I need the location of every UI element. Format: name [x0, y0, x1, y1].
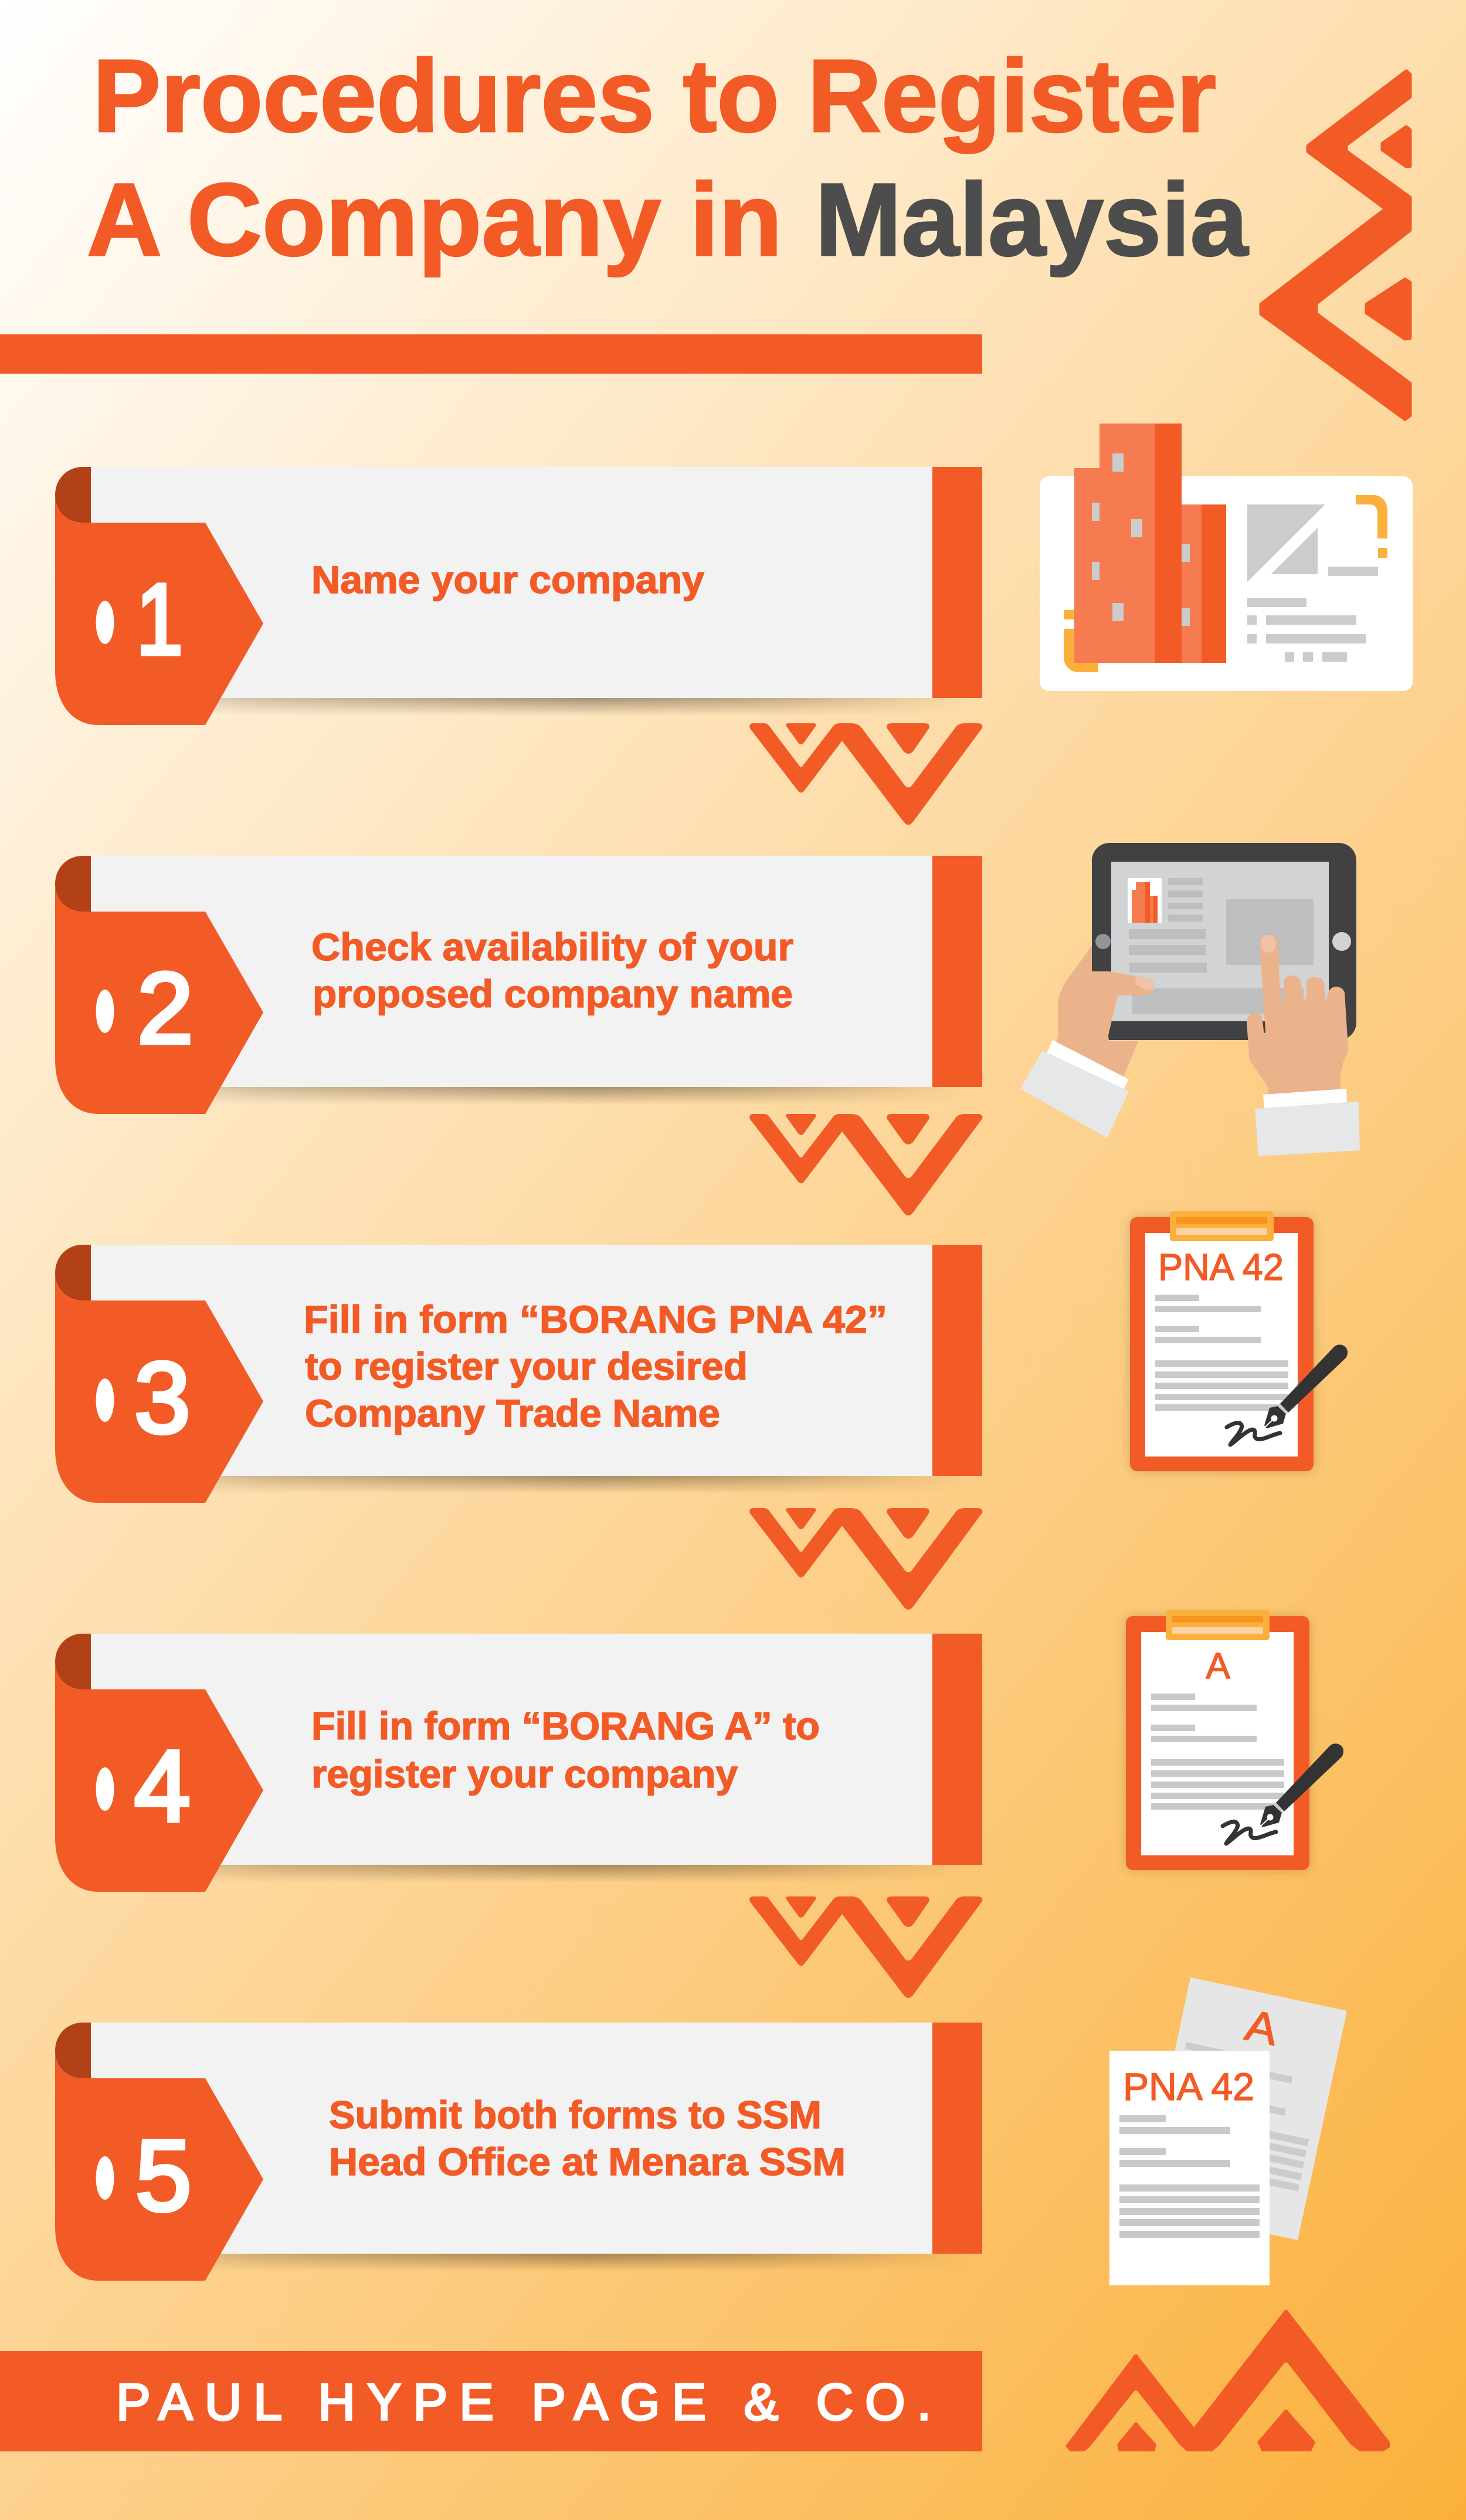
form lines [1151, 1693, 1284, 1810]
windows [1092, 453, 1190, 626]
title: A Company in [87, 162, 782, 277]
number tag [55, 495, 263, 725]
step text [329, 2093, 846, 2183]
front sheet lines [1119, 2115, 1260, 2238]
step text: Check availability of your [311, 925, 793, 968]
number dot [96, 990, 114, 1033]
ribbon end bar [932, 467, 982, 698]
paper [1141, 1632, 1294, 1855]
left hand [1050, 946, 1154, 1079]
board [1130, 1217, 1314, 1471]
step text: Fill in form “BORANG PNA 42” [304, 1298, 887, 1341]
step text: Fill in form “BORANG A” to [311, 1704, 820, 1747]
right sleeve [1255, 1102, 1360, 1156]
step text: Submit both forms to SSM [329, 2093, 822, 2136]
step 2 panel [55, 856, 982, 1114]
title: Procedures to Register [93, 39, 1216, 154]
form label: A [1206, 1646, 1230, 1686]
bracket top right [1356, 495, 1387, 558]
ribbon curl [55, 467, 91, 523]
number dot [96, 2156, 114, 2200]
form label: PNA 42 [1158, 1246, 1284, 1288]
ribbon shadow [213, 1476, 943, 1492]
left sleeve [1020, 1051, 1129, 1138]
number: 1 [136, 563, 183, 676]
icon: clipboard PNA 42 [1130, 1211, 1348, 1471]
front sheet label: PNA 42 [1123, 2065, 1254, 2108]
ribbon shadow [213, 2254, 943, 2270]
back sheet lines [1186, 2045, 1308, 2188]
step text [311, 925, 793, 1015]
ribbon body [91, 1634, 932, 1865]
tablet screen [1111, 862, 1329, 1021]
number: 3 [134, 1342, 191, 1454]
screen content blocks [1129, 878, 1314, 1014]
step 5 panel [55, 2023, 982, 2281]
ribbon shadow [213, 1865, 943, 1881]
left thumbnail [1135, 977, 1154, 990]
number dot [96, 601, 114, 644]
left cuff [1047, 1040, 1129, 1090]
title [87, 39, 1248, 277]
number: 2 [137, 952, 194, 1065]
ribbon end bar [932, 2023, 982, 2254]
number: 5 [135, 2119, 192, 2232]
screen logo [1128, 878, 1162, 923]
tall building [1074, 424, 1155, 663]
step text: Head Office at Menara SSM [329, 2140, 846, 2183]
tablet buttons [1095, 934, 1111, 949]
title underline bar [0, 334, 982, 374]
step text [304, 1298, 887, 1435]
step text: Name your company [311, 558, 704, 601]
pen [1260, 1743, 1343, 1827]
ribbon body [91, 856, 932, 1087]
number tag [55, 2051, 263, 2281]
card logo and lines [1247, 504, 1378, 662]
ribbon curl [55, 2023, 91, 2078]
ribbon shadow [213, 698, 943, 714]
board shadow [1130, 1217, 1314, 1471]
step 3 panel [55, 1245, 982, 1503]
ribbon shadow [213, 1087, 943, 1103]
step text [311, 1704, 820, 1796]
short building [1182, 504, 1202, 663]
icon: two forms stacked [1109, 1977, 1347, 2285]
title: Malaysia [815, 162, 1248, 277]
step text: to register your desired [305, 1344, 748, 1388]
number tag [55, 1662, 263, 1892]
logo: footer mountains [1065, 2310, 1390, 2451]
arrow: down chevron 2 [749, 1114, 982, 1215]
pen [1264, 1344, 1348, 1428]
paper [1145, 1233, 1298, 1457]
signature [1227, 1422, 1280, 1445]
arrow: down chevron 4 [749, 1896, 982, 1998]
arrow: down chevron 1 [749, 723, 982, 825]
ribbon end bar [932, 856, 982, 1087]
right cuff [1263, 1089, 1347, 1108]
number tag [55, 1273, 263, 1503]
step text: register your company [311, 1752, 738, 1796]
logo: top right chevrons [1261, 72, 1410, 419]
form lines [1155, 1295, 1288, 1411]
ribbon body [91, 467, 932, 698]
back sheet label: A [1241, 2000, 1282, 2055]
back sheet [1142, 1977, 1347, 2240]
step text: proposed company name [313, 972, 793, 1015]
clip [1170, 1211, 1274, 1241]
number: 4 [134, 1730, 191, 1842]
clip [1166, 1610, 1270, 1640]
right fingertip nail [1261, 935, 1276, 953]
ribbon curl [55, 856, 91, 912]
ribbon curl [55, 1245, 91, 1300]
ribbon body [91, 2023, 932, 2254]
icon: clipboard A [1126, 1610, 1343, 1870]
footer company name: PAUL HYPE PAGE & CO. [116, 2373, 931, 2431]
ribbon curl [55, 1634, 91, 1689]
board [1126, 1616, 1309, 1870]
icon: business card with building [1040, 424, 1413, 691]
number tag [55, 884, 263, 1114]
step 1 panel [55, 467, 982, 725]
number dot [96, 1767, 114, 1811]
board shadow [1126, 1616, 1309, 1870]
tablet body [1092, 843, 1356, 1040]
front sheet [1109, 2051, 1270, 2285]
signature [1223, 1821, 1276, 1844]
step text: Company Trade Name [305, 1391, 720, 1435]
right hand [1247, 935, 1348, 1096]
card [1040, 476, 1413, 691]
icon: hands holding tablet [1020, 843, 1360, 1156]
arrow: down chevron 3 [749, 1508, 982, 1610]
footer bar [0, 2351, 982, 2451]
ribbon end bar [932, 1634, 982, 1865]
number dot [96, 1378, 114, 1422]
ribbon end bar [932, 1245, 982, 1476]
ribbon body [91, 1245, 932, 1476]
step 4 panel [55, 1634, 982, 1892]
bracket bottom left [1064, 610, 1098, 672]
